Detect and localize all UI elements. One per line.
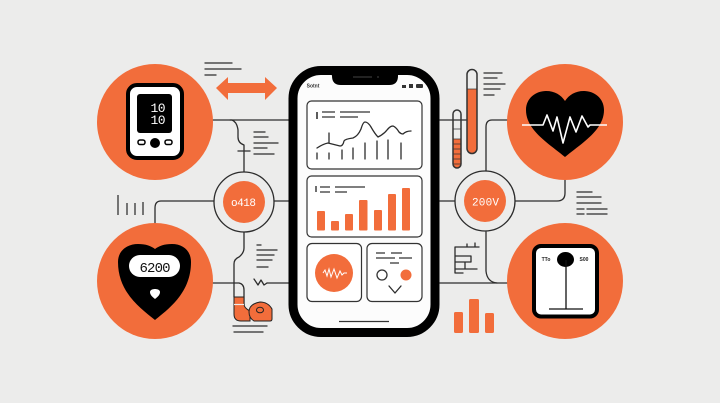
card: status controls [367, 244, 422, 302]
hub circle: right reading: 200V [472, 198, 499, 210]
icon circle: heart with digital readout: 6200 [140, 261, 170, 277]
icon circle: heart with pulse line [507, 64, 623, 180]
status icons [402, 84, 423, 88]
icon circle: heart with digital readout [97, 223, 213, 339]
home indicator [339, 320, 389, 322]
text lines: right middle [577, 192, 607, 214]
double arrow [216, 77, 277, 100]
hub circle: left reading: o418 [231, 198, 256, 210]
circuit glyph [455, 243, 479, 273]
icon circle: weight scale: S00 [580, 257, 589, 263]
notch [331, 72, 398, 85]
hub circle: right reading [455, 171, 515, 231]
text lines: top right [484, 73, 505, 95]
cuff icon [234, 297, 272, 321]
card: line chart [307, 101, 422, 169]
speaker [353, 76, 379, 78]
icon circle: weight scale: TTo [542, 257, 550, 263]
icon circle: weight scale [507, 223, 623, 339]
icon circle: blood pressure monitor: 10 [150, 113, 166, 128]
text lines: beside left connector [254, 132, 278, 154]
phone body [293, 70, 435, 332]
text lines: under cuff [233, 326, 267, 332]
tick marks [118, 195, 143, 215]
status time: Sotnt [307, 84, 320, 90]
small bar chart [454, 299, 494, 333]
text lines: top left [205, 63, 241, 75]
phone [293, 70, 435, 332]
text lines: lower left [257, 245, 277, 267]
thermometer short [453, 110, 461, 168]
card: pulse dial [307, 244, 362, 302]
connector lines [155, 120, 565, 305]
thermometer tall [467, 70, 477, 154]
icon circle: blood pressure monitor [97, 64, 213, 180]
zigzag [254, 279, 267, 285]
hub circle: left reading [214, 172, 274, 232]
icon circle: blood pressure monitor: 10 [150, 101, 166, 116]
card: bar chart [307, 176, 422, 237]
